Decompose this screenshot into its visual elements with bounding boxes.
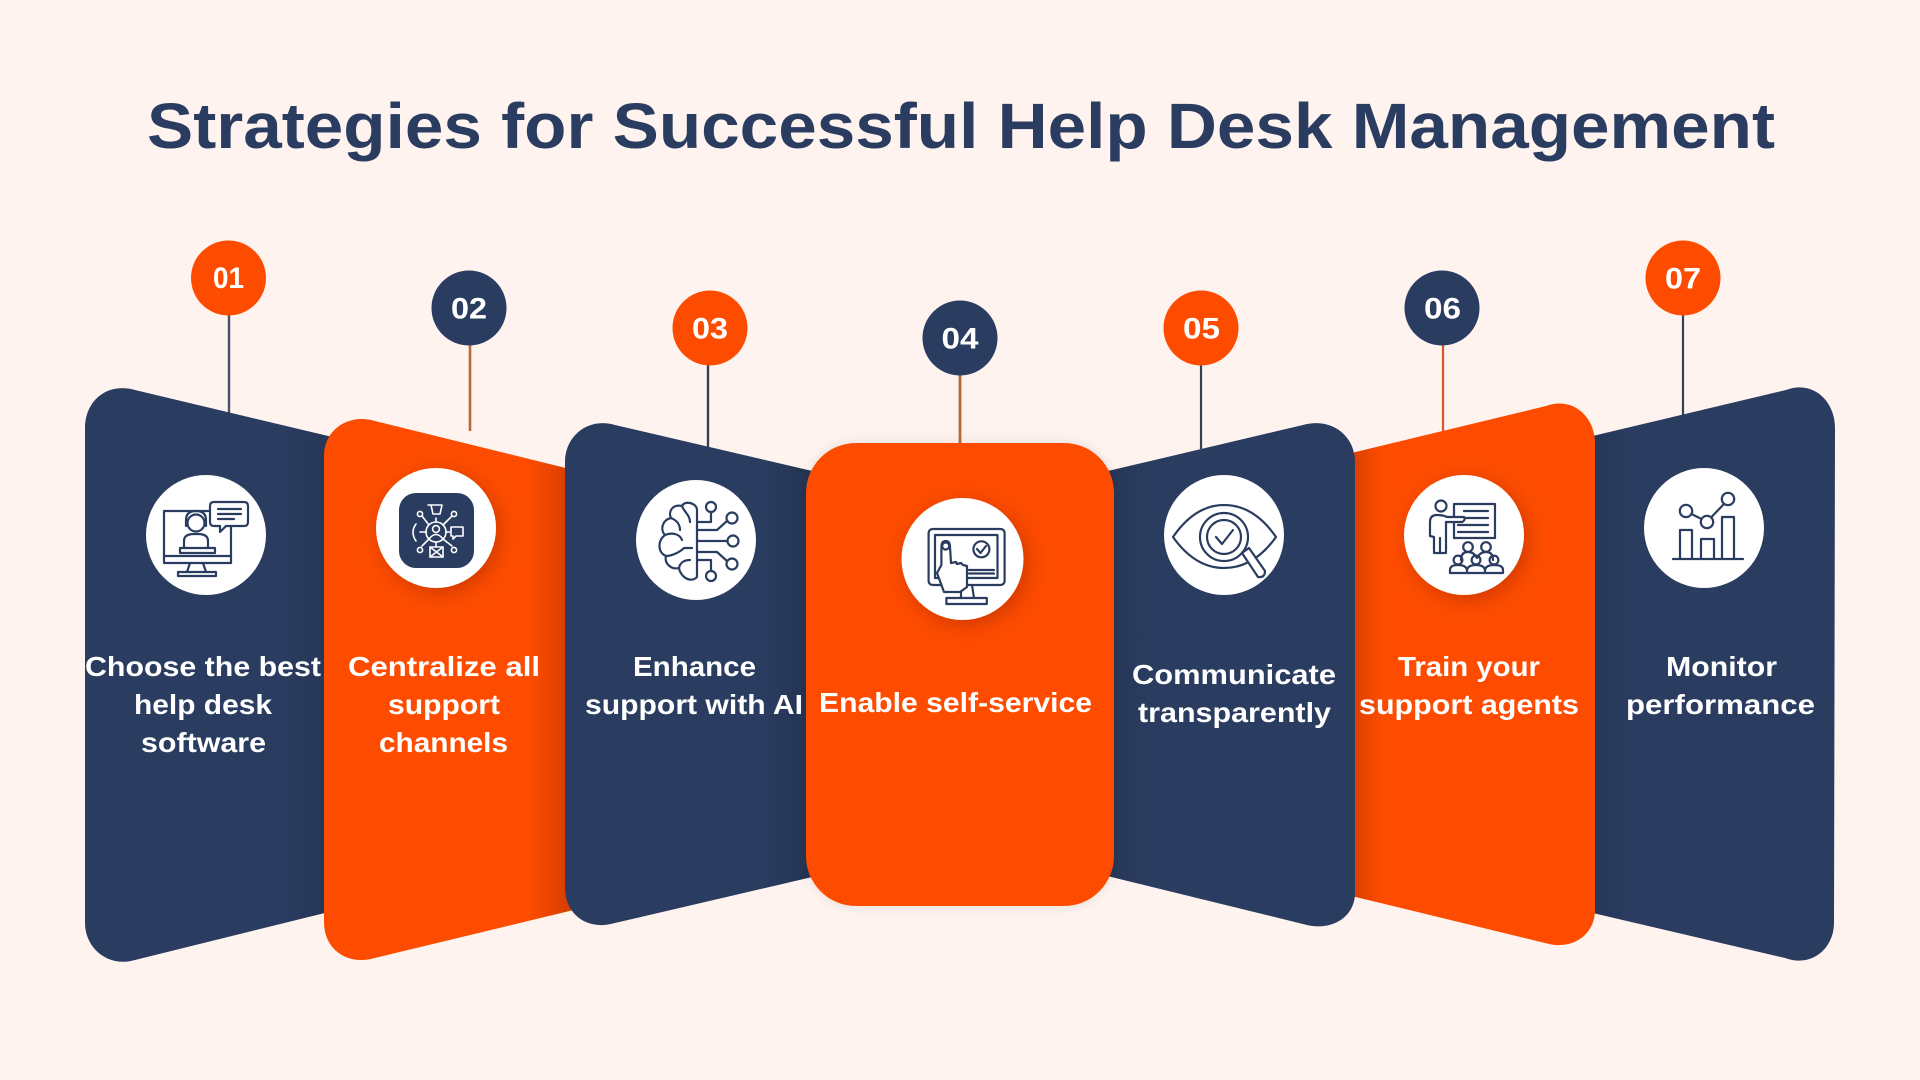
panel: 03 enhance with AI bbox=[565, 290, 825, 925]
connector line 03 bbox=[707, 365, 709, 448]
label: choose the best help desk software: help desk bbox=[134, 689, 272, 720]
panel: 06 train agents bbox=[1335, 270, 1595, 945]
number badge 03: 03 bbox=[692, 312, 728, 346]
label: enhance support with AI: support with AI bbox=[585, 689, 803, 720]
number badge 02 bbox=[432, 270, 506, 346]
number badge 05 bbox=[1164, 290, 1238, 366]
label: centralize all support channels: channels bbox=[379, 727, 508, 758]
icon: trainer and audience bbox=[1404, 475, 1524, 595]
connector line 04 bbox=[959, 375, 961, 444]
card 5 shape bbox=[1095, 423, 1355, 926]
label: train your support agents: support agents bbox=[1359, 689, 1579, 720]
icon: AI brain bbox=[636, 480, 756, 600]
panel: 05 communicate transparently bbox=[1095, 290, 1355, 926]
label: communicate transparently: Communicate bbox=[1132, 659, 1336, 690]
label: centralize all support channels bbox=[348, 651, 540, 758]
card 2 shape bbox=[324, 419, 590, 960]
number badge 06: 06 bbox=[1424, 292, 1461, 326]
number badge 07 bbox=[1646, 240, 1720, 316]
label: enhance support with AI: Enhance bbox=[633, 651, 756, 682]
label: monitor performance bbox=[1626, 651, 1815, 720]
icon: agent on monitor bbox=[146, 475, 266, 595]
label: train your support agents bbox=[1359, 651, 1579, 720]
icon: performance chart bbox=[1644, 468, 1764, 588]
connector line 05 bbox=[1200, 365, 1202, 449]
number badge 01 bbox=[191, 240, 266, 316]
panel: 04 enable self-service bbox=[806, 300, 1114, 906]
card 3 shape bbox=[565, 423, 825, 925]
panel: 01 choose software bbox=[85, 240, 345, 962]
icon: eye and magnifier bbox=[1164, 475, 1284, 595]
label: communicate transparently bbox=[1132, 659, 1336, 728]
number badge 04 bbox=[922, 300, 998, 376]
label: enable self-service: Enable self-service bbox=[819, 687, 1092, 718]
label: choose the best help desk software: Choose the best bbox=[85, 651, 321, 682]
card 7 shape bbox=[1580, 387, 1835, 961]
number badge 01: 01 bbox=[213, 262, 244, 295]
label: choose the best help desk software: software bbox=[141, 727, 266, 758]
card 6 shape bbox=[1335, 403, 1595, 945]
panel: 07 monitor performance bbox=[1580, 240, 1835, 961]
number badge 06 bbox=[1404, 270, 1480, 346]
number badge 02: 02 bbox=[451, 292, 487, 326]
connector line 01 bbox=[228, 314, 230, 414]
label: monitor performance: performance bbox=[1626, 689, 1815, 720]
card 1 shape bbox=[85, 388, 345, 962]
connector line 02 bbox=[469, 345, 471, 431]
title: Strategies for Successful Help Desk Management bbox=[147, 90, 1775, 162]
label: enhance support with AI bbox=[585, 651, 803, 720]
label: monitor performance: Monitor bbox=[1666, 651, 1777, 682]
number badge 07: 07 bbox=[1665, 262, 1701, 296]
label: centralize all support channels: support bbox=[388, 689, 500, 720]
icon: omnichannel hub bbox=[376, 468, 496, 588]
label: train your support agents: Train your bbox=[1398, 651, 1540, 682]
label: choose the best help desk software bbox=[85, 651, 321, 758]
number badge 04: 04 bbox=[942, 322, 979, 356]
connector line 07 bbox=[1682, 315, 1684, 416]
label: centralize all support channels: Centralize all bbox=[348, 651, 540, 682]
icon: self-service touch screen bbox=[902, 498, 1024, 620]
number badge 05: 05 bbox=[1183, 312, 1220, 346]
panel: 02 centralize channels bbox=[324, 270, 590, 960]
number badge 03 bbox=[672, 290, 748, 366]
label: communicate transparently: transparently bbox=[1138, 697, 1331, 728]
connector line 06 bbox=[1442, 345, 1444, 431]
card 4 shape bbox=[806, 443, 1114, 906]
